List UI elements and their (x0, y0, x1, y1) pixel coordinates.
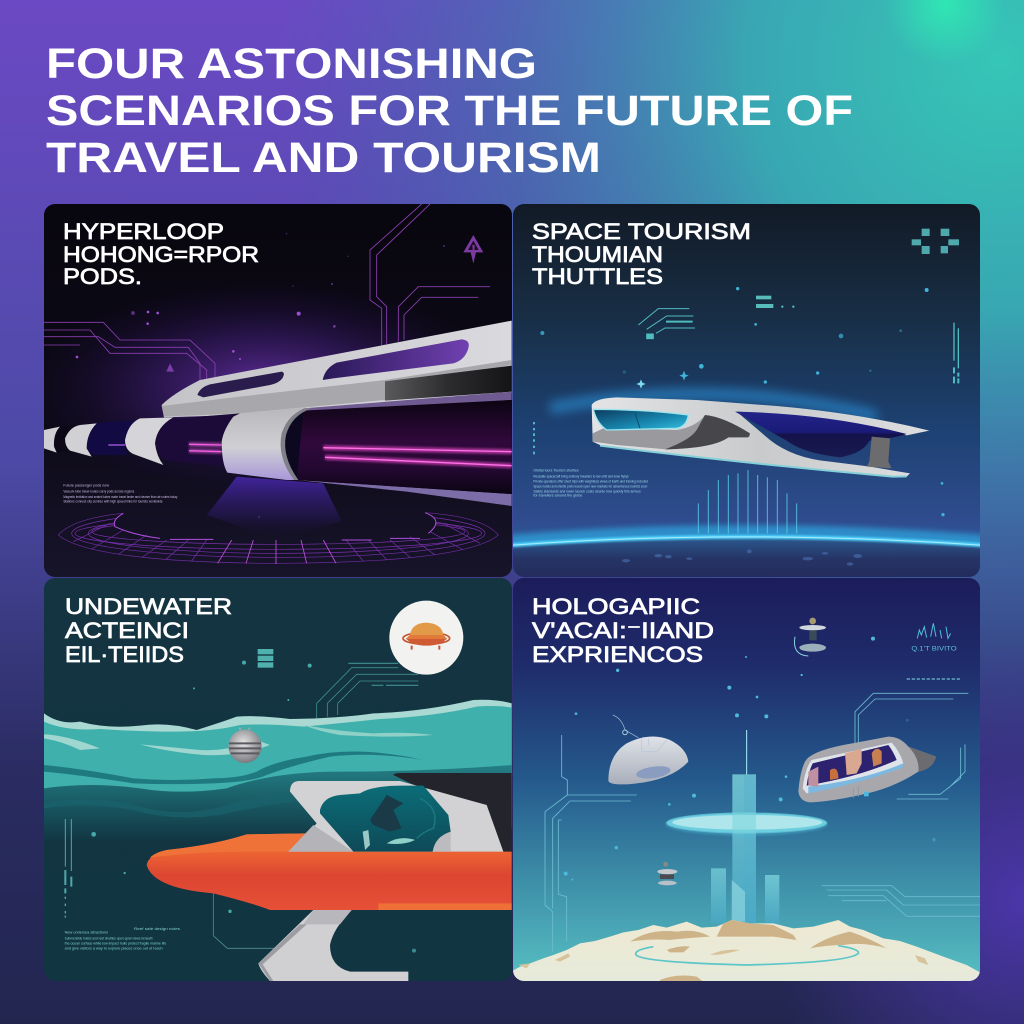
panel: hyperloop pods (40, 200, 520, 580)
panel: underwater hotels (44, 578, 512, 981)
vertical gauge (954, 323, 958, 383)
icon: planet badge (389, 601, 463, 675)
planet horizon (510, 533, 983, 580)
fine print: the ocean surface while low impact hulls protect fragile marine life (65, 941, 166, 945)
fine print: Stations connect city centres with high speed links for tourists worldwide (63, 499, 163, 504)
icon: floating dome (608, 715, 688, 784)
submarine vessel (147, 773, 512, 981)
circuit traces (545, 679, 980, 952)
ocean waves (44, 700, 512, 842)
fine print: Orbital tours Tourism shuttles (533, 469, 579, 473)
fine print: Submersible hotels and reef shuttles open quiet views beneath (65, 936, 153, 940)
signal bars (698, 470, 797, 533)
icon: hologram skyline label (911, 623, 957, 652)
icon: square cross pixels (912, 229, 959, 254)
fine print (63, 483, 177, 504)
icon: holographic shuttle (798, 737, 936, 802)
heading: hyperloop: HYPERLOOP (63, 219, 224, 244)
title: TRAVEL AND TOURISM (46, 135, 601, 182)
stars (564, 637, 936, 881)
icon: stacked bars (258, 649, 273, 668)
heading: underwater: UNDEWATER (65, 594, 232, 619)
fine print: and give visitors a way to explore places once out of reach (65, 947, 163, 951)
icon: arrow marker (463, 235, 483, 263)
fine print: Private operators offer short trips with weightless views of Earth and training included (533, 480, 648, 484)
circuit traces (44, 204, 490, 382)
dots (91, 661, 416, 953)
heading: hyperloop (63, 219, 259, 289)
icon: small drone top (794, 618, 826, 656)
icon: equals bars (756, 296, 794, 308)
fine print (65, 927, 180, 951)
moon surface (512, 920, 982, 983)
light cone under the pod (206, 476, 342, 528)
heading: space tourism (532, 219, 751, 289)
icon: small cone marker (166, 363, 174, 372)
panel: space tourism (510, 204, 983, 580)
title: FOUR ASTONISHING (46, 41, 537, 88)
heading: holographic: EXPRIENCOS (532, 642, 703, 667)
heading: underwater (65, 594, 232, 667)
heading: holographic (532, 594, 714, 667)
fine print: Reusable spacecraft bring ordinary travellers to low orbit and lunar flybys (533, 475, 629, 479)
star dots (76, 233, 445, 518)
heading: hyperloop: HOHONG=RPOR (63, 242, 259, 267)
perspective grid platform (58, 509, 498, 564)
heading: space tourism: THOUMIAN (532, 242, 663, 267)
heading: space tourism: THUTTLES (532, 264, 663, 289)
fine print: New undersea attractions (65, 930, 108, 934)
icon: small drone lower (657, 862, 677, 885)
space shuttle (592, 397, 929, 477)
fine print: for travellers around the globe (533, 494, 582, 498)
circuit traces (213, 663, 418, 948)
fine print: Vacuum tube travel routes carry pods across regions (63, 489, 134, 494)
title (46, 41, 853, 182)
fine print: Future passenger pods now (63, 483, 109, 488)
stars (540, 287, 945, 516)
heading: underwater: EIL·TEIIDS (65, 642, 184, 667)
heading: underwater: ACTEINCI (65, 618, 189, 643)
circuit glyph (638, 309, 695, 339)
heading: holographic: V'ACAI:⁻IIAND (532, 618, 714, 643)
icon: hologram skyline label: Q.1'T BIVITO (911, 645, 957, 652)
gauge lines (65, 819, 71, 918)
dot column (533, 422, 535, 454)
hologram tower (665, 730, 828, 925)
fine print: Magnetic levitation and sealed tubes make travel faster and cleaner than air routes today (63, 494, 177, 499)
fine print (533, 469, 648, 498)
fine print: Safety standards and lower launch costs decide how quickly this arrives (533, 489, 641, 493)
heading: space tourism: SPACE TOURISM (532, 219, 751, 244)
hyperloop pod (44, 321, 512, 506)
heading: holographic: HOLOGAPIIC (532, 594, 700, 619)
icon: sphere drone (228, 728, 262, 763)
heading: hyperloop: PODS. (63, 264, 142, 289)
fine print: Reef safe design notes (134, 927, 180, 931)
ship glow arc (550, 394, 877, 417)
neon light lines (323, 448, 512, 466)
title: SCENARIOS FOR THE FUTURE OF (46, 88, 853, 135)
fine print: Space hotels and shuttle ports would open new markets for adventurous tourists soon (533, 484, 647, 488)
panel: holographic vacation experiences (512, 578, 982, 983)
